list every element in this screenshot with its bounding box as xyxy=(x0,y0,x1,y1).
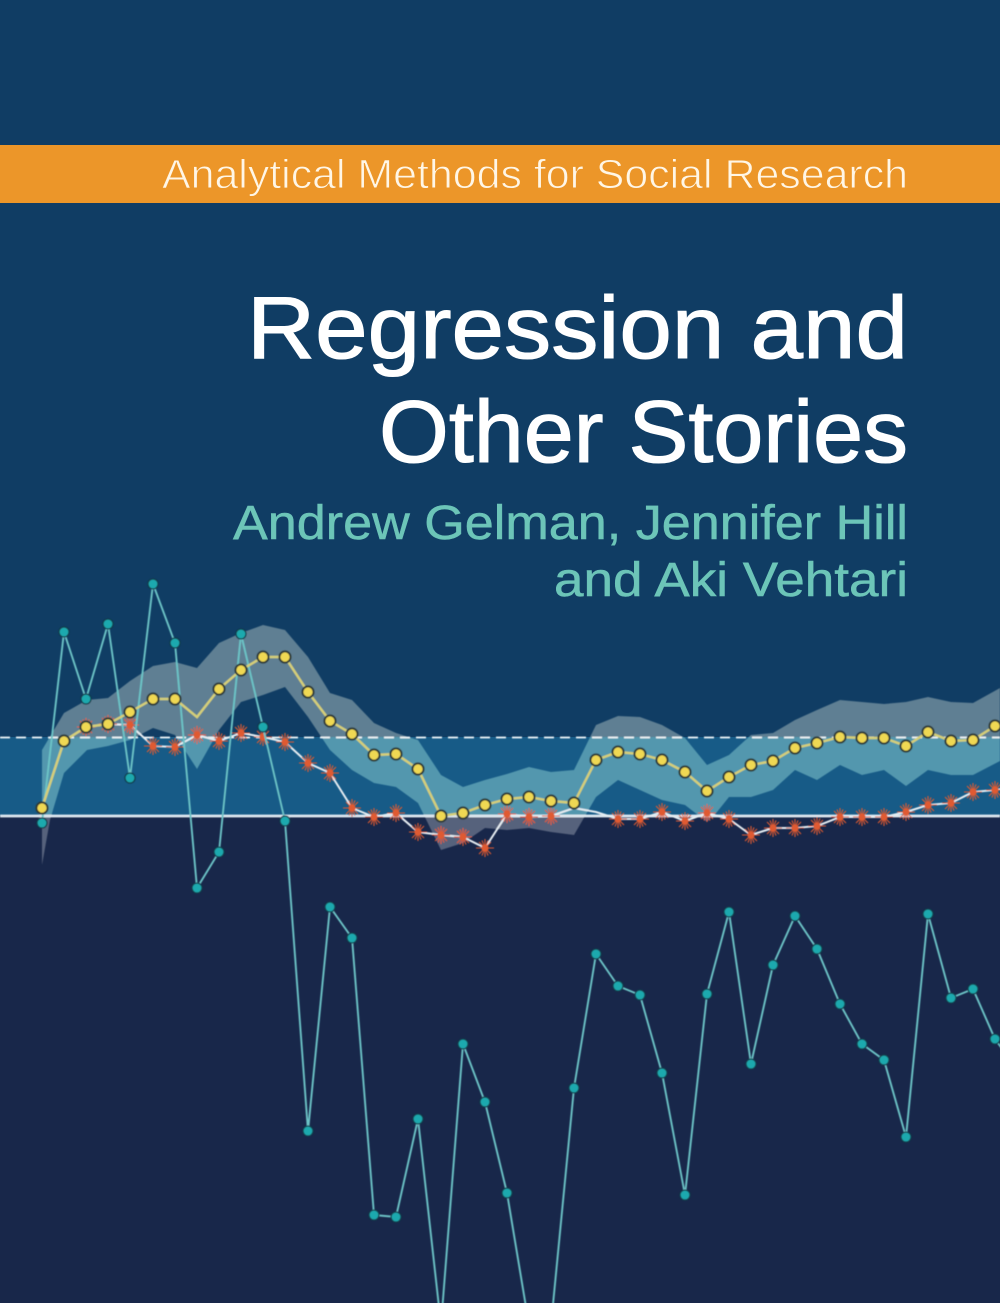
series title: Analytical Methods for Social Research xyxy=(162,151,908,197)
series banner xyxy=(0,145,1000,203)
authors: Andrew Gelman, Jennifer Hill xyxy=(233,496,908,550)
authors: and Aki Vehtari xyxy=(554,553,908,607)
uncertainty band xyxy=(42,625,1000,865)
book title: Other Stories xyxy=(379,382,908,481)
solid baseline xyxy=(0,815,1000,817)
teal series xyxy=(37,579,1000,1303)
book title xyxy=(247,278,908,481)
red series xyxy=(42,715,1000,857)
authors xyxy=(233,496,908,607)
dashed reference line xyxy=(0,736,1000,738)
background: upper navy panel xyxy=(0,0,1000,737)
book title: Regression and xyxy=(247,278,908,377)
background: middle blue strip xyxy=(0,737,1000,816)
yellow series xyxy=(36,651,1000,822)
line chart xyxy=(0,579,1000,1303)
background: lower dark panel xyxy=(0,816,1000,1303)
